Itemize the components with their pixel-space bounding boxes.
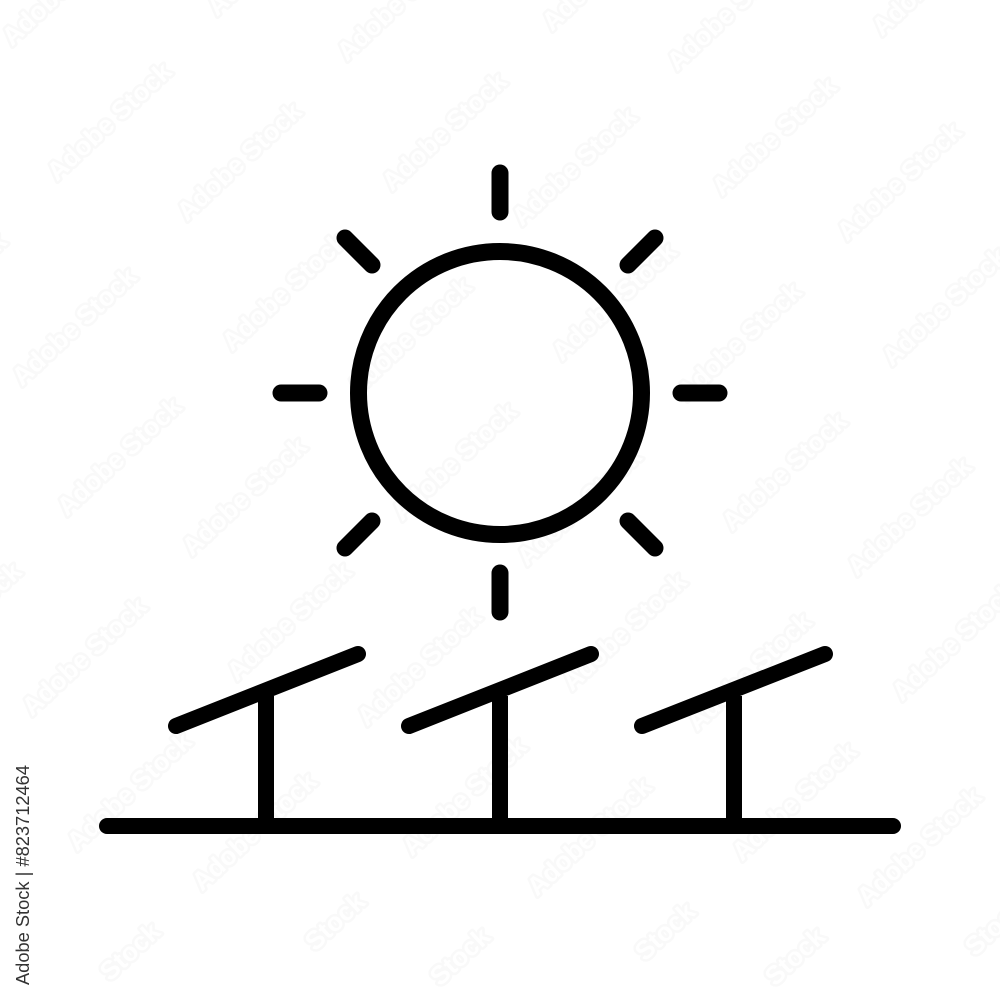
faint tiled watermark: Adobe Stock xyxy=(171,96,308,226)
faint tiled watermark: Adobe Stock xyxy=(556,566,693,696)
faint tiled watermark: Adobe Stock xyxy=(186,766,323,896)
icon: sun xyxy=(281,173,719,612)
faint tiled watermark: Adobe Stock xyxy=(681,606,818,736)
faint tiled watermark: Stock xyxy=(94,916,166,986)
faint tiled watermark: Adobe Stock xyxy=(6,261,143,391)
faint tiled watermark: Stock xyxy=(629,896,701,966)
faint tiled watermark: Adobe Stock xyxy=(726,736,863,866)
sun disc xyxy=(358,252,642,534)
faint tiled watermark: Adobe Stock xyxy=(386,396,523,526)
faint tiled watermark: Adobe Stock xyxy=(851,781,988,911)
panel 3 xyxy=(642,654,825,826)
faint tiled watermark: Adobe Stock xyxy=(41,56,178,186)
faint tiled watermark: Adobe Stock xyxy=(341,271,478,401)
faint tiled watermark: Adobe Stock xyxy=(841,451,978,581)
faint tiled watermark: Adobe Stock xyxy=(511,441,648,571)
faint tiled watermark: Adobe Stock xyxy=(396,731,533,861)
ground line xyxy=(107,818,893,834)
faint tiled watermark: Adobe Stock xyxy=(706,71,843,201)
faint tiled watermark: Adobe Stock xyxy=(506,101,643,231)
faint tiled watermark: Adobe Stock xyxy=(351,601,488,731)
faint tiled watermark: Adobe Stock xyxy=(16,591,153,721)
faint tiled watermark: Adobe Stock xyxy=(546,236,683,366)
faint tiled watermark: Adobe Stock xyxy=(216,226,353,356)
faint tiled watermark: Adobe Stock xyxy=(716,406,853,536)
sun rays xyxy=(281,173,719,612)
icon: solar panels xyxy=(107,654,893,826)
panel 2 xyxy=(409,654,591,826)
vertical stock image id text: Adobe Stock | #823712464 xyxy=(13,765,33,985)
faint tiled watermark: Stock xyxy=(759,921,831,991)
faint tiled watermark: Adobe Stock xyxy=(671,276,808,406)
faint tiled watermark: Adobe Stock xyxy=(176,431,313,561)
faint tiled watermark: Adobe Stock xyxy=(831,116,968,246)
faint tiled watermark: Adobe Stock xyxy=(376,66,513,196)
faint tiled watermark: Adobe Stock xyxy=(61,726,198,856)
panel 1 xyxy=(176,654,358,826)
faint tiled watermark: Stock xyxy=(424,921,496,991)
faint tiled watermark: Adobe Stock xyxy=(221,556,358,686)
faint tiled watermark: Adobe Stock xyxy=(51,391,188,521)
faint tiled watermark: Stock xyxy=(299,886,371,956)
faint tiled watermark: Adobe Stock xyxy=(521,771,658,901)
